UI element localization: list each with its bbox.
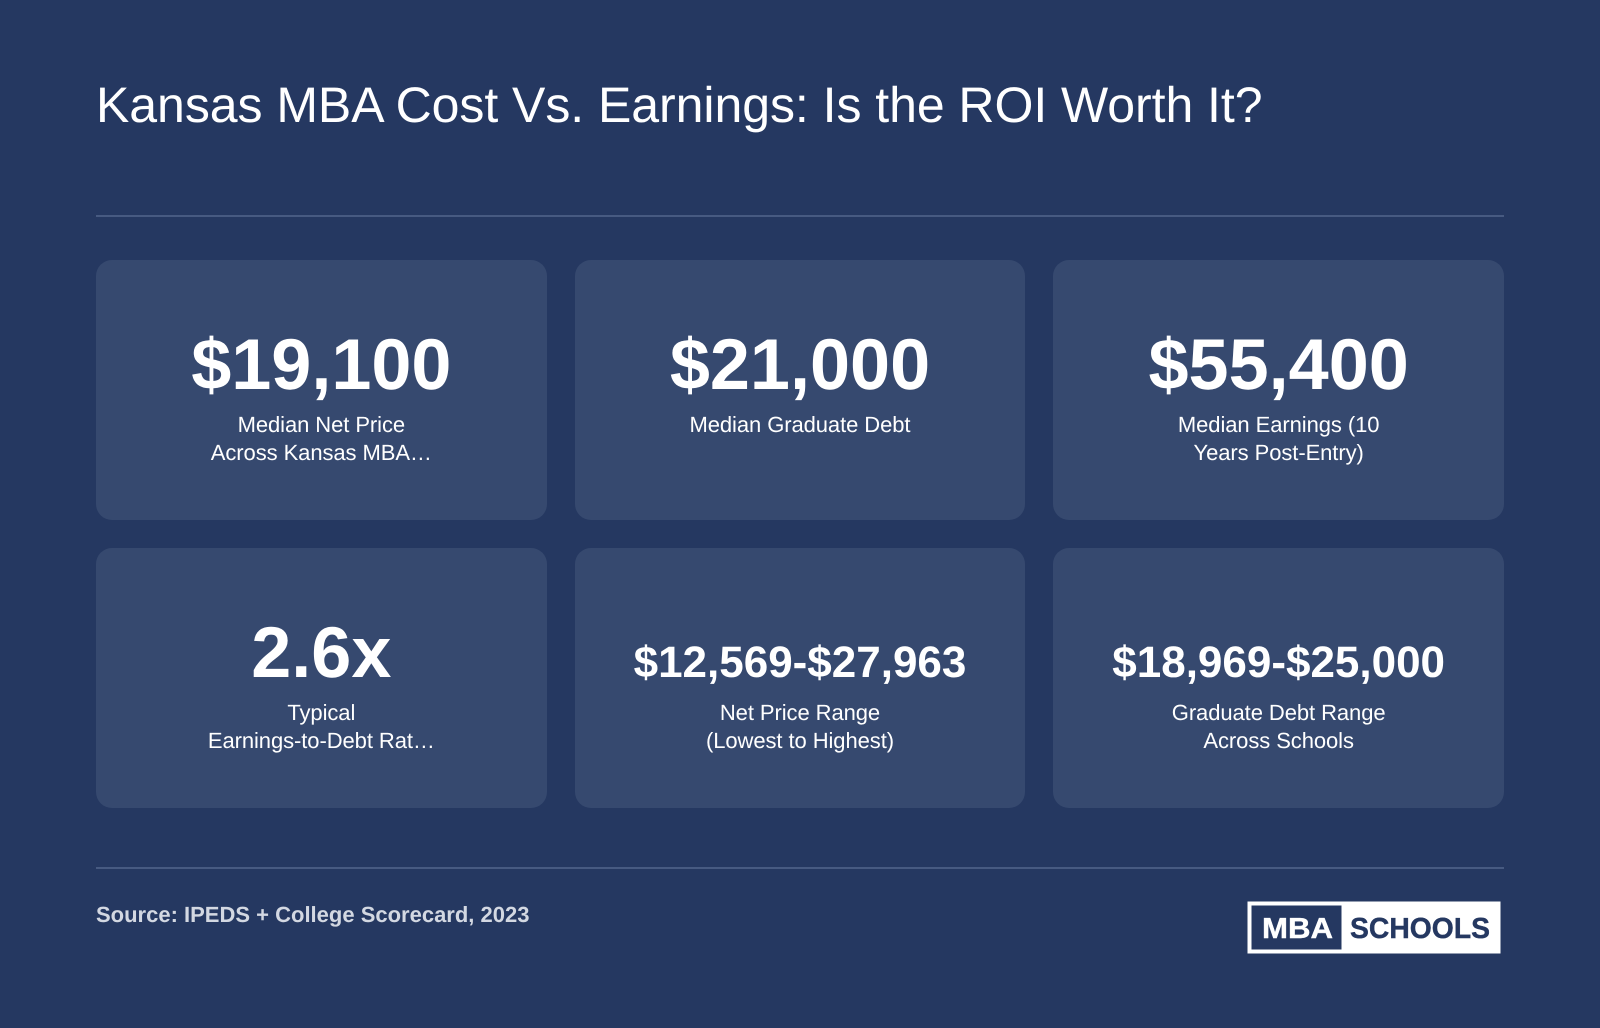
- stat label: [1172, 700, 1386, 753]
- panel: median net price: [96, 260, 547, 520]
- panel: median earnings: [1053, 260, 1504, 520]
- stat value: $55,400: [1149, 325, 1409, 405]
- logo: MBA Schools: SCHOOLS: [1350, 913, 1490, 945]
- stat label: Median Earnings (10: [1178, 412, 1379, 437]
- panel: net price range: [575, 548, 1025, 808]
- stat label: Across Schools: [1203, 728, 1354, 753]
- stat label: (Lowest to Highest): [706, 728, 894, 753]
- stat label: Typical: [287, 700, 355, 725]
- title: Kansas MBA Cost Vs. Earnings: Is the ROI Worth It?: [96, 77, 1262, 133]
- stat label: Median Net Price: [238, 412, 405, 437]
- stat value: $21,000: [670, 325, 930, 405]
- stat label: Earnings-to-Debt Rat…: [208, 728, 435, 753]
- stat label: Median Graduate Debt: [689, 412, 910, 437]
- stat label: [208, 700, 435, 753]
- stat label: [210, 412, 432, 465]
- logo: MBA Schools: [1248, 902, 1500, 954]
- logo: MBA Schools: MBA: [1262, 913, 1333, 945]
- stat label: Net Price Range: [720, 700, 880, 725]
- panel: median graduate debt: [575, 260, 1025, 520]
- stat value: $19,100: [191, 325, 451, 405]
- stat label: Graduate Debt Range: [1172, 700, 1386, 725]
- panel: graduate debt range: [1053, 548, 1504, 808]
- stat value: $18,969-$25,000: [1112, 638, 1445, 687]
- stat label: Across Kansas MBA…: [211, 440, 432, 465]
- stat label: [706, 700, 894, 753]
- stat value: $12,569-$27,963: [634, 638, 966, 687]
- stat value: 2.6x: [251, 613, 391, 693]
- stat label: [1178, 412, 1379, 465]
- stat label: Years Post-Entry): [1194, 440, 1364, 465]
- panel: earnings-to-debt ratio: [96, 548, 547, 808]
- source note: Source: IPEDS + College Scorecard, 2023: [96, 902, 529, 927]
